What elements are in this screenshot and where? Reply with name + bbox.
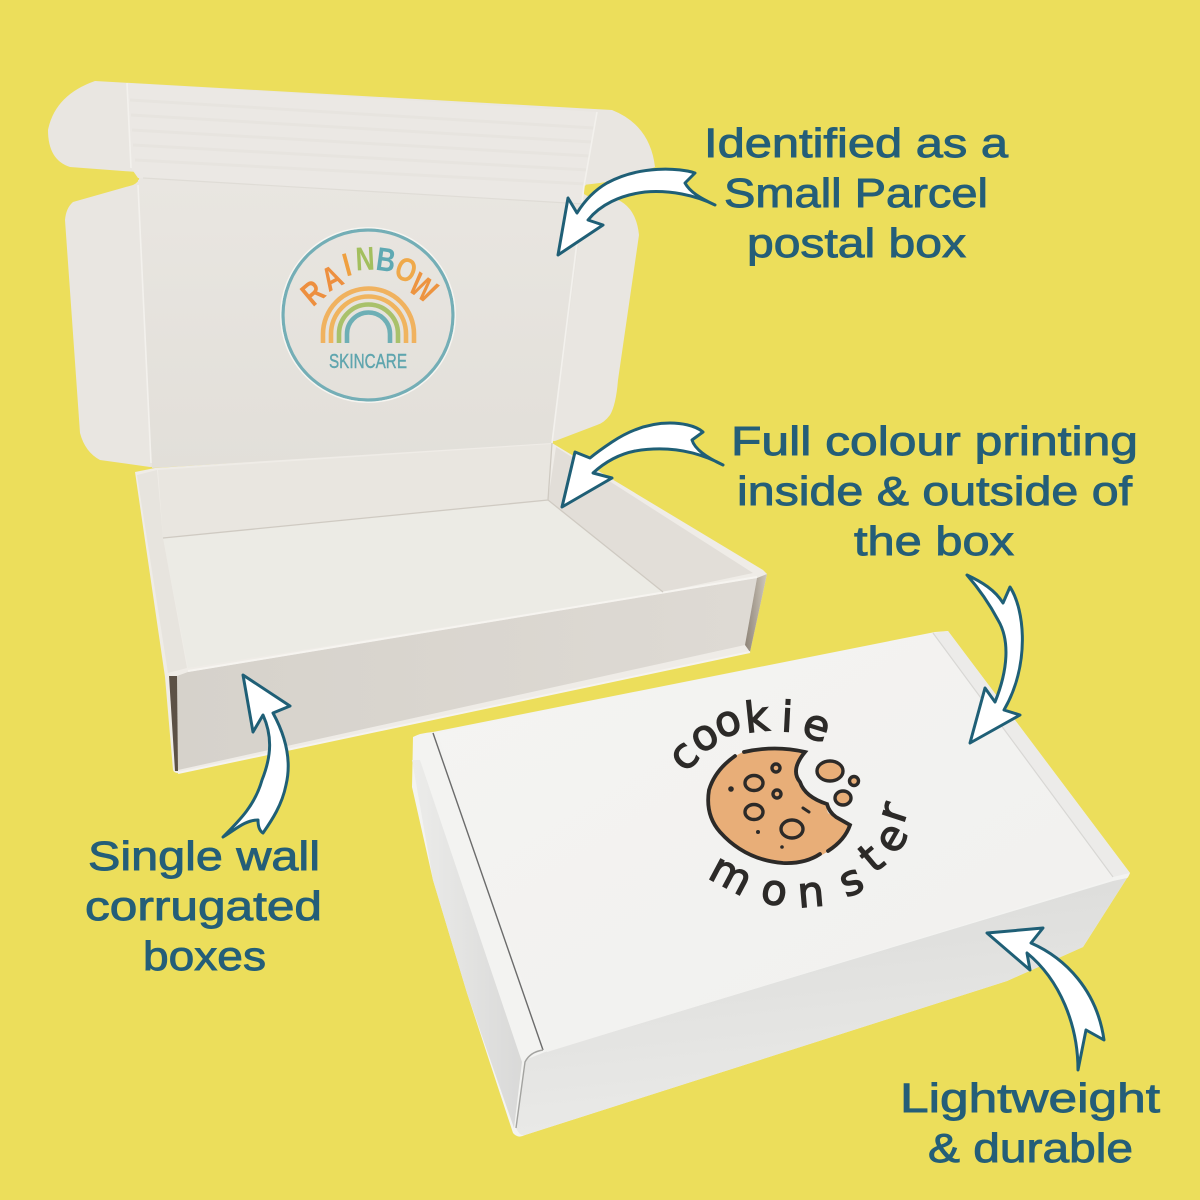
logo word: cookie: e bbox=[797, 698, 836, 752]
arrow: to base corner bbox=[562, 423, 723, 507]
logo word: monster: o bbox=[758, 864, 791, 916]
closed box bbox=[412, 631, 1130, 1137]
box base bbox=[135, 443, 767, 773]
logo word: monster bbox=[702, 796, 918, 918]
open box bbox=[48, 81, 767, 773]
logo word: RAINBOW: A bbox=[315, 258, 349, 299]
text: full colour line 3: the box bbox=[854, 518, 1015, 564]
box lid bbox=[48, 81, 655, 468]
logo word: SKINCARE: SKINCARE bbox=[329, 351, 407, 373]
logo word: monster: r bbox=[866, 796, 918, 828]
arrow: to closed box side bbox=[987, 928, 1104, 1070]
logo word: cookie: i bbox=[780, 692, 794, 742]
callout: single wall bbox=[88, 675, 320, 879]
logo word: cookie: k bbox=[742, 691, 772, 743]
logo word: RAINBOW: R bbox=[294, 273, 332, 313]
text: single wall line 3: boxes bbox=[143, 933, 266, 979]
arrow: to closed box bbox=[967, 575, 1022, 743]
logo word: RAINBOW: O bbox=[390, 250, 422, 291]
logo word: monster: t bbox=[849, 834, 893, 882]
callout: lightweight bbox=[900, 928, 1161, 1121]
logo word: monster: s bbox=[832, 853, 870, 907]
text: full colour line 1: Full colour printing bbox=[731, 418, 1138, 464]
callout: full colour printing bbox=[562, 418, 1138, 743]
logo word: RAINBOW: I bbox=[339, 247, 355, 284]
logo: Rainbow Skincare bbox=[281, 228, 455, 402]
logo word: RAINBOW: W bbox=[402, 266, 444, 311]
logo word: monster: e bbox=[863, 814, 918, 861]
logo: Cookie Monster bbox=[657, 691, 918, 918]
cookie bbox=[708, 748, 858, 864]
logo word: monster: n bbox=[795, 866, 826, 918]
logo word: cookie: c bbox=[657, 729, 708, 780]
arrow: to front wall bbox=[223, 675, 290, 837]
logo word: RAINBOW: N bbox=[355, 241, 375, 278]
text: small parcel line 2: Small Parcel bbox=[724, 170, 988, 216]
rainbow arcs bbox=[323, 288, 414, 343]
text: full colour line 2: inside & outside of bbox=[737, 468, 1133, 514]
logo word: monster: m bbox=[702, 843, 761, 906]
logo word: cookie bbox=[657, 691, 836, 780]
text: small parcel line 3: postal box bbox=[747, 220, 967, 266]
text: lightweight line 1: Lightweight bbox=[900, 1075, 1161, 1121]
text: lightweight line 2: & durable bbox=[928, 1125, 1133, 1171]
text: single wall line 1: Single wall bbox=[88, 833, 320, 879]
text: small parcel line 1: Identified as a bbox=[704, 120, 1008, 166]
logo word: RAINBOW bbox=[294, 241, 444, 313]
logo word: cookie: o bbox=[680, 708, 727, 763]
logo word: cookie: o bbox=[707, 694, 747, 748]
logo word: RAINBOW: B bbox=[374, 241, 398, 280]
text: single wall line 2: corrugated bbox=[85, 883, 322, 929]
arrow: to lid bbox=[558, 169, 715, 255]
callout: small parcel bbox=[558, 120, 1008, 255]
